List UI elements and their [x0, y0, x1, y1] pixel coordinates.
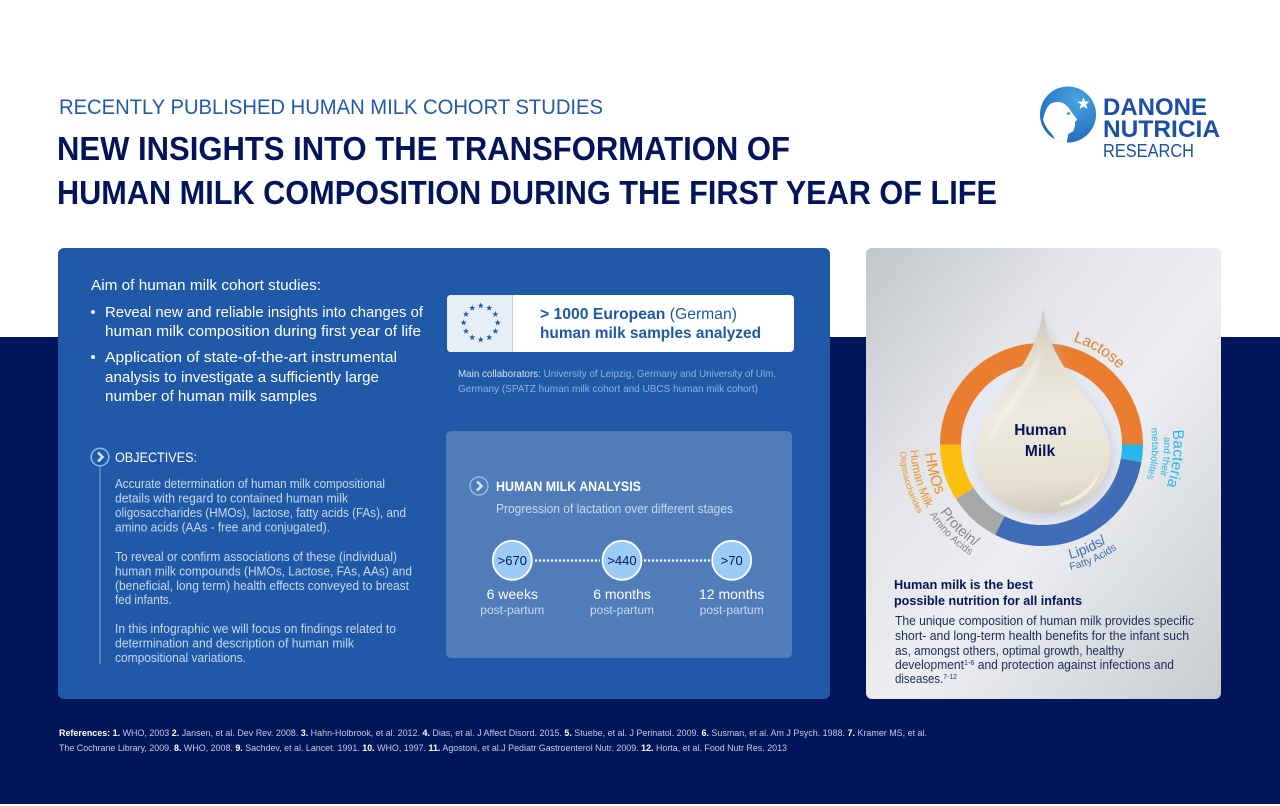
milk drop: Milk: [1025, 443, 1055, 460]
objectives heading: [91, 448, 197, 664]
aim bullets: Reveal new and reliable insights into changes of: [105, 304, 424, 321]
body text: The unique composition of human milk provides specific: [895, 614, 1194, 628]
panel: aim and objectives: [58, 248, 830, 699]
panel: human milk composition: [866, 248, 1221, 699]
body text: [895, 614, 1194, 686]
title: NEW INSIGHTS INTO THE TRANSFORMATION OF: [57, 130, 790, 167]
callout: samples analyzed: > 1000 European (German): [540, 306, 737, 323]
body text: short- and long-term health benefits for the infant such: [895, 629, 1189, 643]
body text: as, amongst others, optimal growth, healthy: [895, 644, 1125, 658]
timeline: post-partum: [700, 603, 764, 617]
logo: Danone Nutricia Research: RESEARCH: [1103, 141, 1194, 161]
background: navy band: [0, 337, 1280, 804]
ring chart: [950, 354, 1132, 536]
timeline: >440: [607, 553, 637, 568]
aim bullets: analysis to investigate a sufficiently large: [105, 369, 379, 386]
logo: Danone Nutricia Research: DANONE: [1103, 94, 1207, 121]
label: HMOs: Human Milk: [910, 450, 932, 508]
timeline: post-partum: [590, 603, 654, 617]
body text: and protection against infections and: [974, 658, 1174, 672]
milk drop: [961, 308, 1122, 525]
collaborators note: [458, 368, 776, 395]
references: The Cochrane Library, 2009. 8. WHO, 2008. 9. Sachdev, et al. Lancet. 1991. 10. WHO, 1997. 11. Agostoni, et al.J Pediatr Gastroenterol Nutr. 2009. 12. Horta, et al. Food Nutr Res. 2013: [59, 743, 787, 753]
label: HMOs: [900, 450, 943, 514]
label: HMOs: HMOs: [925, 453, 943, 494]
icon: EU stars: [461, 302, 501, 342]
timeline: [480, 541, 764, 617]
objectives text: details with regard to contained human milk: [115, 492, 349, 506]
objectives text: determination and description of human milk: [115, 636, 355, 650]
objectives text: (beneficial, long term) health effects conveyed to breast: [115, 579, 409, 593]
objectives text: oligosaccharides (HMOs), lactose, fatty acids (FAs), and: [115, 506, 406, 520]
objectives text: Accurate determination of human milk compositional: [115, 477, 385, 491]
label: bacteria: metabolites: [1147, 428, 1160, 480]
label: bacteria: [1147, 428, 1184, 487]
timeline: 6 months: [593, 586, 651, 602]
body text: diseases.: [895, 672, 948, 686]
objectives text: compositional variations.: [115, 651, 246, 665]
heading: best nutrition: Human milk is the best: [894, 577, 1034, 592]
heading: best nutrition: [894, 577, 1082, 608]
aim bullets: Application of state-of-the-art instrumental: [105, 349, 397, 366]
subtitle: RECENTLY PUBLISHED HUMAN MILK COHORT STUDIES: [59, 96, 603, 119]
objectives text: amino acids (AAs - free and conjugated).: [115, 520, 330, 534]
aim bullets: number of human milk samples: [105, 388, 317, 405]
logo: Danone Nutricia Research: [1040, 86, 1220, 161]
objectives text: fed infants.: [115, 593, 172, 607]
collaborators note: Main collaborators: University of Leipzig, Germany and University of Ulm,: [458, 368, 776, 380]
aim bullets: [91, 304, 424, 405]
label: protein: Protein/: [940, 507, 981, 546]
references: References: 1. WHO, 2003 2. Jansen, et al. Dev Rev. 2008. 3. Hahn-Holbrook, et al. 2012. 4. Dias, et al. J Affect Disord. 2015. 5. Stuebe, et al. J Perinatol. 2009. 6. Susman, et al. Am J Psych. 1988. 7. Kramer MS, et al.: [59, 728, 927, 738]
label: lipids: [1068, 534, 1116, 570]
icon: chevron: [470, 477, 488, 495]
callout: samples analyzed: [447, 295, 794, 352]
callout: samples analyzed: human milk samples analyzed: [540, 325, 761, 342]
label: lipids: Lipids/: [1068, 534, 1105, 559]
timeline: 12 months: [699, 586, 764, 602]
objectives heading: OBJECTIVES:: [115, 449, 197, 465]
aim bullets: human milk composition during first year of life: [105, 323, 421, 340]
timeline: 6 weeks: [487, 586, 538, 602]
label: lipids: Fatty Acids: [1070, 545, 1116, 570]
timeline: >670: [498, 553, 527, 568]
milk drop: Human: [1014, 422, 1067, 439]
timeline: >70: [721, 553, 743, 568]
aim heading: Aim of human milk cohort studies:: [91, 277, 321, 294]
panel: human milk analysis: Progression of lactation over different stages: [496, 502, 733, 516]
label: bacteria: Bacteria: [1166, 430, 1184, 487]
label: protein: Amino Acids: [930, 513, 972, 555]
logo: Danone Nutricia Research: NUTRICIA: [1103, 116, 1220, 143]
label: HMOs: Oligosaccharides: [900, 452, 922, 514]
body text: 1-6: [964, 658, 974, 667]
body text: 7-12: [943, 672, 957, 681]
title: HUMAN MILK COMPOSITION DURING THE FIRST YEAR OF LIFE: [57, 174, 997, 211]
objectives text: human milk compounds (HMOs, Lactose, FAs, AAs) and: [115, 564, 412, 578]
objectives text: [115, 477, 412, 665]
label: lactose: Lactose: [1074, 332, 1123, 368]
panel: human milk analysis: HUMAN MILK ANALYSIS: [496, 479, 641, 494]
objectives text: In this infographic we will focus on findings related to: [115, 622, 396, 636]
timeline: post-partum: [480, 603, 544, 617]
label: bacteria: and their: [1160, 437, 1171, 477]
title: [57, 130, 997, 211]
heading: best nutrition: possible nutrition for all infants: [894, 593, 1082, 608]
objectives text: To reveal or confirm associations of these (individual): [115, 550, 397, 564]
references: [59, 728, 927, 753]
panel: human milk analysis: [446, 431, 792, 658]
body text: development: [895, 658, 967, 672]
collaborators note: Germany (SPATZ human milk cohort and UBCS human milk cohort): [458, 383, 758, 395]
